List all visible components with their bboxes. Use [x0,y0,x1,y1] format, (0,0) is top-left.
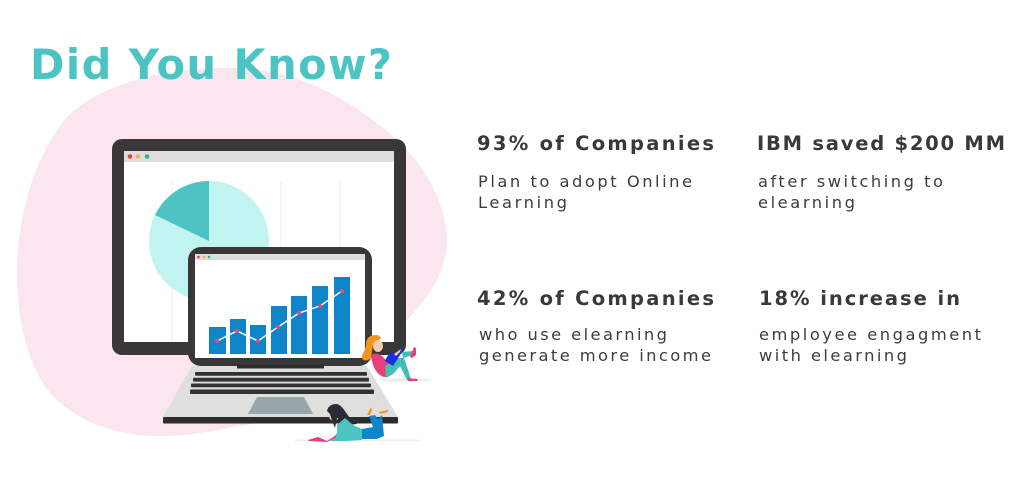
laptop screen [188,247,372,366]
fact: IBM saved $200 MM: after switching to [758,172,943,191]
fact: 93% of companies [477,132,714,212]
line chart overlay [215,289,344,343]
fact: 42% of companies [477,287,714,365]
fact: IBM saved $200 MM: IBM saved $200 MM [757,132,1005,155]
pie chart [149,181,269,301]
bar chart [209,277,350,354]
fact: 18% increase: employee engagment [759,325,981,344]
fact: 93% of companies: Plan to adopt Online [478,172,692,191]
fact: 18% increase [759,287,981,365]
fact: 42% of companies: 42% of Companies [477,287,714,310]
title: Did You Know? [30,40,392,89]
reader lying on floor [295,404,420,442]
pink background blob [17,68,447,436]
reader sitting on laptop [362,335,432,382]
fact: 93% of companies: 93% of Companies [477,132,714,155]
fact: 18% increase: 18% increase in [759,287,960,310]
fact: 42% of companies: who use elearning [479,325,667,344]
fact: IBM saved $200 MM [757,132,1005,212]
fact: 42% of companies: generate more income [479,346,711,365]
laptop base [163,365,398,424]
fact: 18% increase: with elearning [759,346,907,365]
desktop monitor [112,139,406,355]
fact: IBM saved $200 MM: elearning [758,193,855,212]
illustration: devices and readers [112,139,432,442]
fact: 93% of companies: Learning [478,193,567,212]
